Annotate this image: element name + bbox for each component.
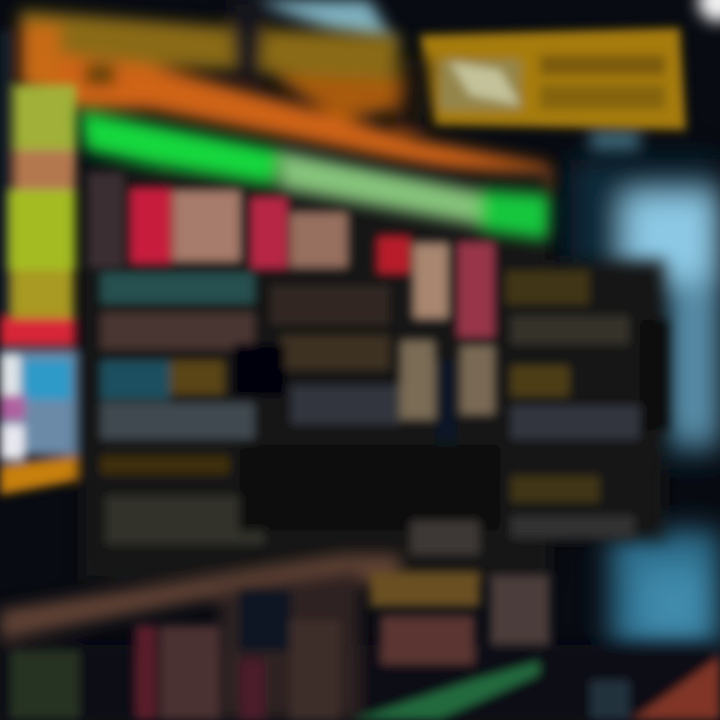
chart: bottom columns <box>10 520 550 720</box>
panel: top light patches <box>250 0 720 150</box>
panel: top yellow sign <box>420 28 686 130</box>
panel: bottom shelf band <box>0 555 720 720</box>
chart: data rows, left <box>100 272 265 545</box>
panel: right side sky <box>570 160 720 650</box>
chart: red and pink column heads <box>88 172 495 338</box>
panel: top orange banner <box>20 0 550 195</box>
panel: bottom right red wedge <box>590 655 720 720</box>
chart: data rows, centre <box>235 285 500 530</box>
panel: green band <box>80 110 550 240</box>
chart: data rows, right <box>505 270 670 539</box>
panel: left colour column <box>0 30 80 495</box>
panel: mid dark body <box>82 170 665 580</box>
